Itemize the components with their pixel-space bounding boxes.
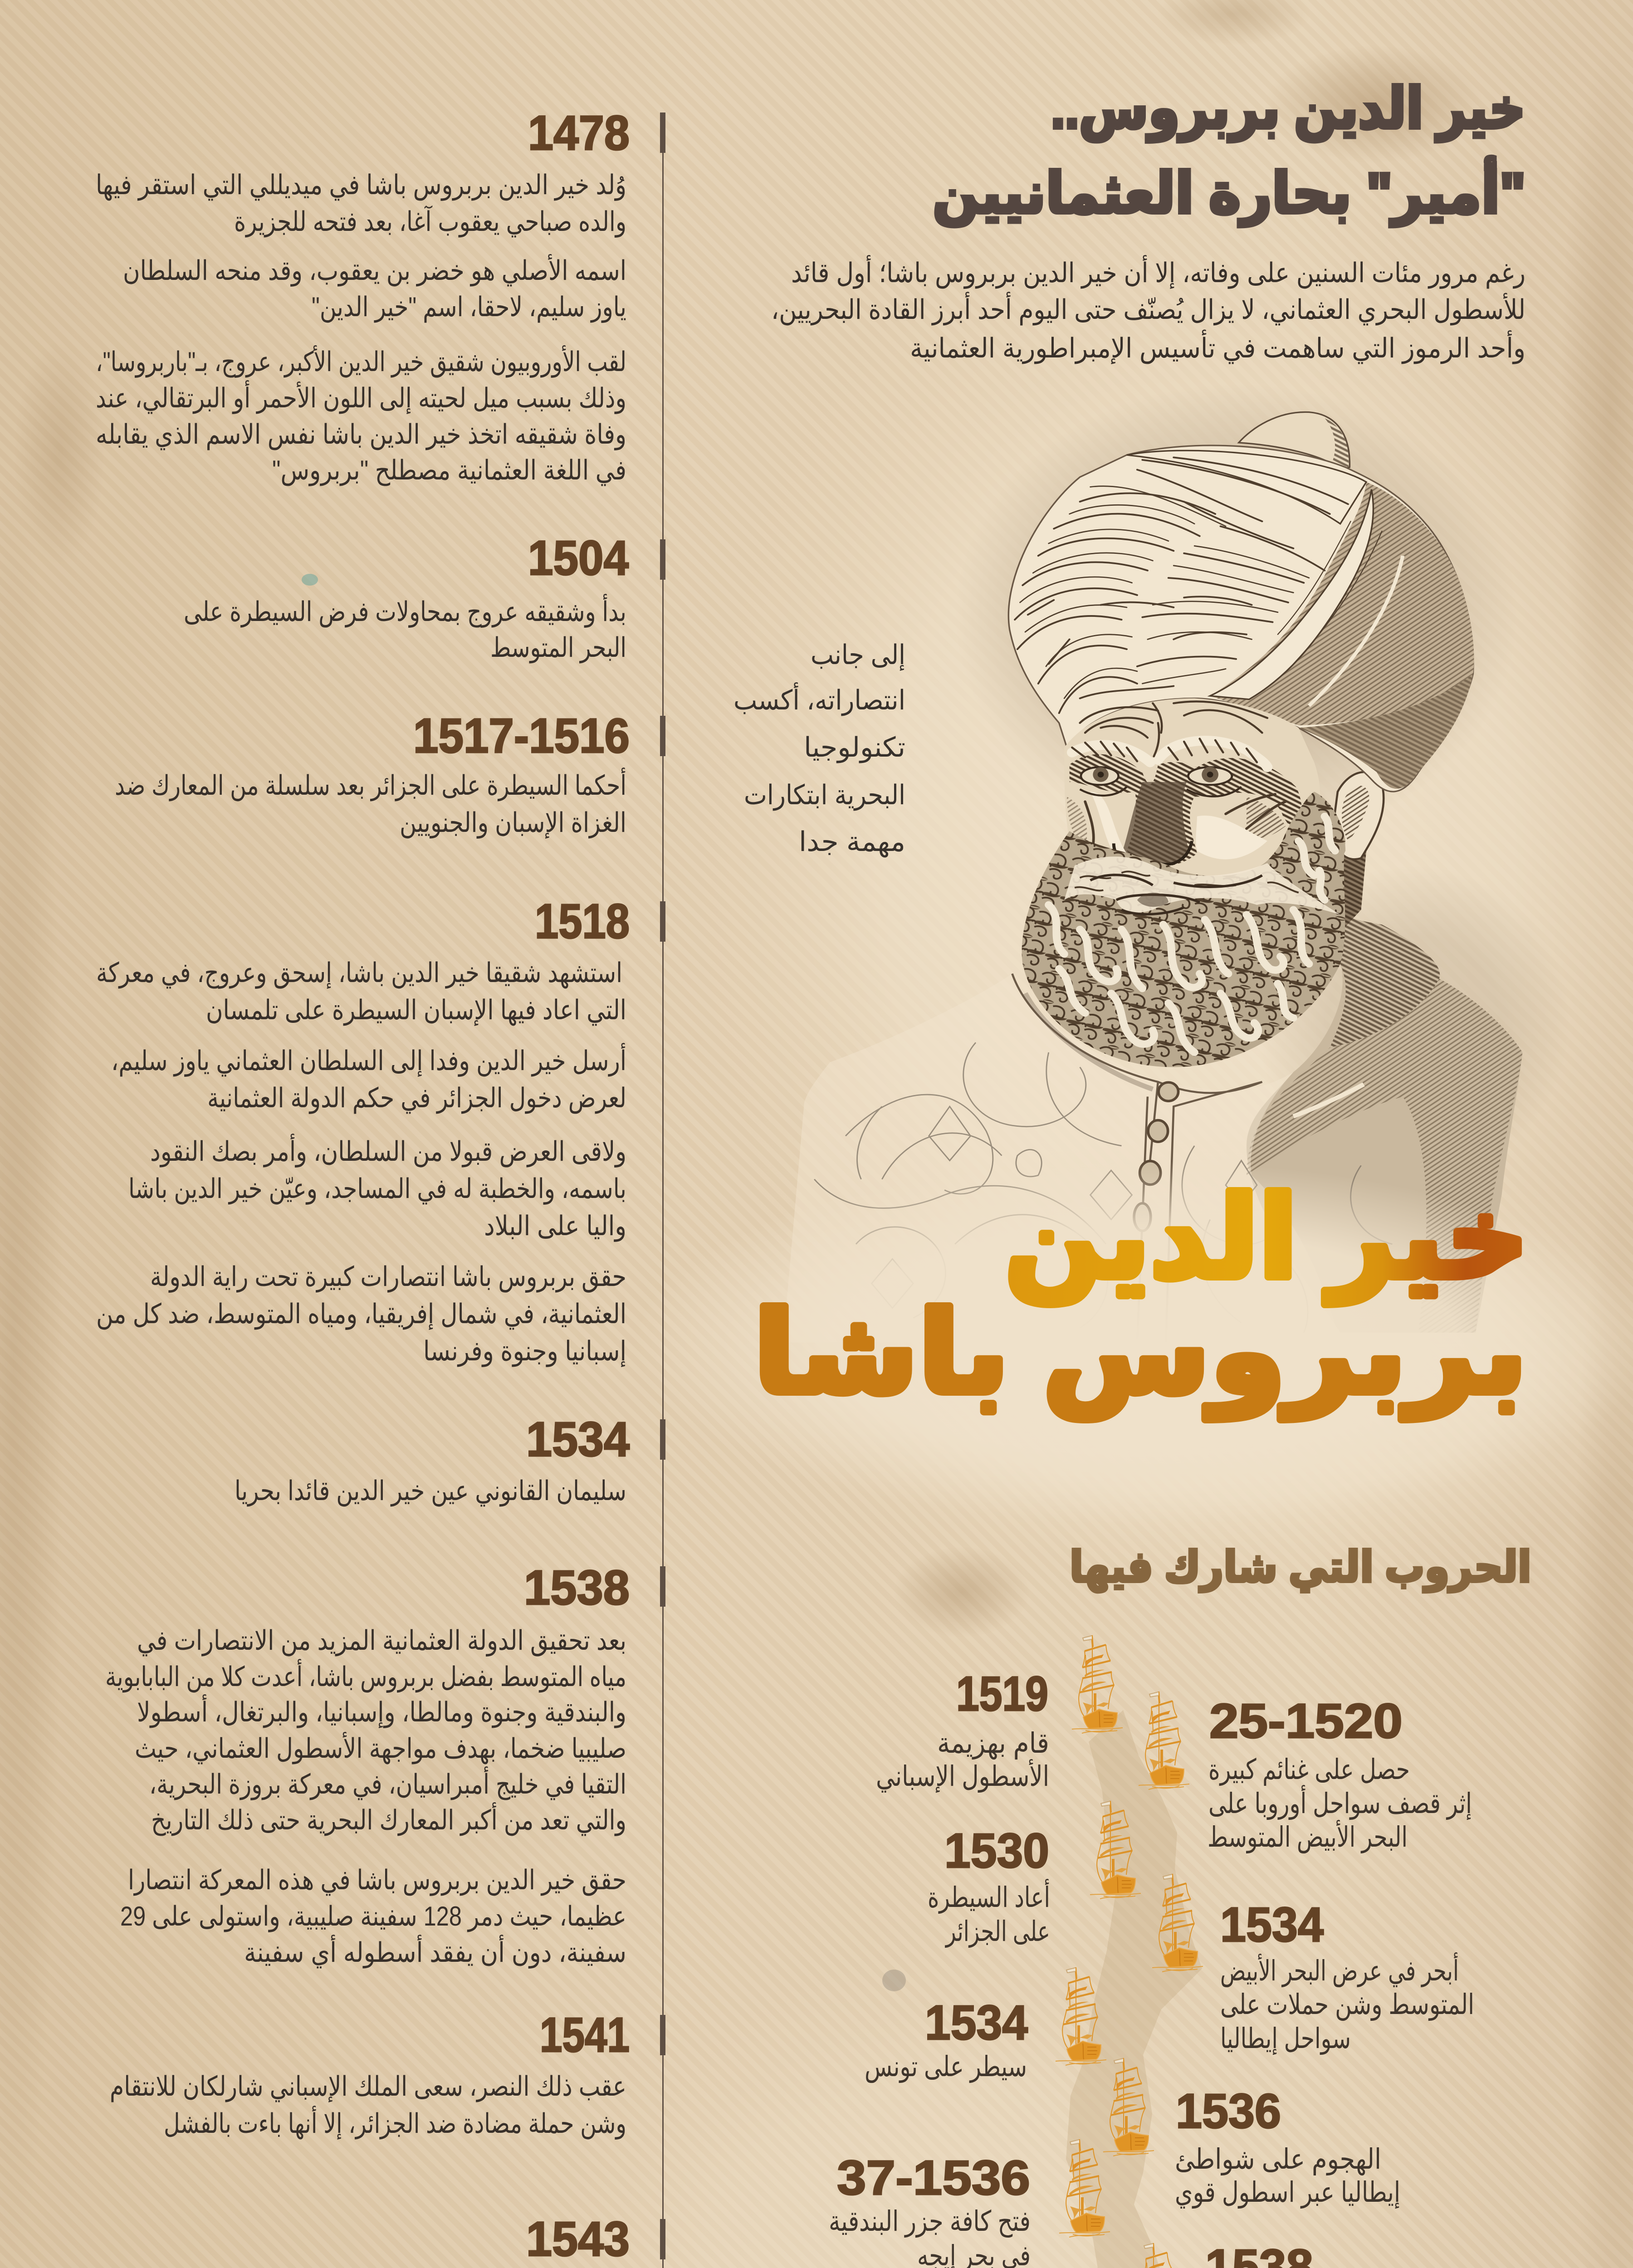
war: 1536-37: فتح كافة جزر البندقية [829,2206,1031,2238]
war: 1536: الهجوم على شواطئ [1175,2144,1381,2176]
side quote: انتصاراته، أكسب [733,682,905,716]
title: "أمير" بحارة العثمانيين [933,156,1525,227]
nose [1114,841,1192,867]
timeline axis [662,113,664,2268]
timeline: 1504: بدأ وشقيقه عروج بمحاولات فرض السيطرة على [184,594,626,628]
timeline: 1516-1517 [115,708,665,839]
war: 1536-37 [829,2150,1031,2268]
buttons [1134,1082,1178,1231]
timeline: 1478: لقب الأوروبيون شقيق خير الدين الأكبر، عروج، بـ"باربروسا"، [96,345,626,378]
war: 1520-25: حصل على غنائم كبيرة [1208,1754,1410,1786]
timeline: 1538 [105,1560,665,1969]
icon: ship 1 [1072,1635,1123,1733]
timeline: 1538: مياه المتوسط بفضل بربروس باشا، أعدت كلا من البابابوية [105,1659,626,1693]
ear [1332,772,1384,859]
timeline: 1518: استشهد شقيقا خير الدين باشا، إسحق وعروج، في معركة [96,958,622,989]
eyes [1080,767,1242,797]
war: 1519: قام بهزيمة [937,1728,1049,1760]
war: 1519: الأسطول الإسباني [876,1759,1049,1793]
portrait of Barbarossa [783,384,1569,1343]
shirt arabesque [814,1042,1392,1333]
war: 1536: إيطاليا عبر اسطول قوي [1175,2177,1400,2209]
timeline: 1538: عظيما، حيث دمر 128 سفينة صليبية، واستولى على 29 [120,1901,626,1932]
war: 1519: 1519 [956,1666,1048,1721]
war: 1534 right: أبحر في عرض البحر الأبيض [1220,1952,1459,1987]
timeline: 1504: 1504 [528,530,629,585]
timeline: 1518: ولاقى العرض قبولا من السلطان، وأمر بصك النقود [150,1134,626,1168]
side quote: إلى جانب [811,640,905,671]
timeline: 1518 [96,894,665,1367]
timeline: 1518: التي اعاد فيها الإسبان السيطرة على تلمسان [206,995,626,1026]
big name title: بربروس باشا [753,1290,1527,1420]
brows and forehead [1072,701,1286,846]
timeline: 1516-1517: الغزاة الإسبان والجنويين [400,807,626,839]
war: 1534 right: 1534 [1220,1897,1324,1952]
timeline: 1478: في اللغة العثمانية مصطلح "بربروس" [272,455,626,486]
war: 1530 [928,1823,1050,1948]
war: 1536: 1536 [1176,2083,1281,2138]
timeline: 1538: حقق خير الدين بربروس باشا في هذه المعركة انتصارا [128,1865,626,1896]
timeline: 1478: وذلك بسبب ميل لحيته إلى اللون الأحمر أو البرتقالي، عند [96,380,626,414]
intro paragraph [771,255,1525,364]
intro paragraph: وأحد الرموز التي ساهمت في تأسيس الإمبراطورية العثمانية [910,329,1525,364]
timeline: 1518: إسبانيا وجنوة وفرنسا [423,1336,626,1367]
timeline: 1538: 1538 [524,1560,630,1615]
timeline: 1478 [96,105,665,486]
war: 1530: 1530 [944,1823,1049,1878]
timeline: 1534 [235,1412,665,1507]
timeline: 1504 [184,530,665,664]
war: 1530: على الجزائر [945,1916,1050,1948]
timeline: 1543 [96,2211,665,2268]
icon: ship 3 [1090,1801,1141,1899]
big name title [753,1174,1529,1420]
timeline: 1538: بعد تحقيق الدولة العثمانية المزيد من الانتصارات في [137,1625,626,1657]
war: 1520-25 [1208,1693,1472,1853]
neck [1309,841,1366,949]
war: 1520-25: إثر قصف سواحل أوروبا على [1208,1785,1472,1820]
icon: ship 5 [1056,1967,1106,2065]
timeline: 1541: وشن حملة مضادة ضد الجزائر، إلا أنها باءت بالفشل [164,2106,626,2140]
timeline: 1518: 1518 [535,894,630,948]
face shadows [1067,754,1302,867]
beard [1022,792,1345,1067]
turban knob [1239,412,1349,470]
war: 1534 left [865,1995,1028,2083]
timeline: 1541: عقب ذلك النصر، سعى الملك الإسباني شارلكان للانتقام [110,2071,626,2102]
war: 1534 right: المتوسط وشن حملات على [1220,1989,1474,2021]
timeline: 1534: سليمان القانوني عين خير الدين قائدا بحريا [235,1476,626,1507]
timeline: 1538: صليبيا ضخما، بهدف مواجهة الأسطول العثماني، حيث [135,1732,626,1765]
timeline: 1541 [110,2007,665,2140]
timeline: 1504: البحر المتوسط [490,632,626,664]
timeline: 1478: اسمه الأصلي هو خضر بن يعقوب، وقد منحه السلطان [123,254,626,287]
title: خير الدين بربروس.. [1051,77,1525,142]
timeline: 1518: باسمه، والخطبة له في المساجد، وعيّن خير الدين باشا [128,1173,626,1205]
timeline: 1518: حقق بربروس باشا انتصارات كبيرة تحت راية الدولة [150,1261,626,1293]
face [1064,699,1320,912]
icon: ship 2 [1139,1691,1189,1789]
portrait fade at bottom [635,1161,1633,1524]
war: 1536-37: 37-1536 [837,2150,1030,2205]
title [933,77,1525,227]
timeline: 1478: 1478 [528,105,630,160]
side quote [733,640,905,858]
timeline: 1478: وفاة شقيقه اتخذ خير الدين باشا نفس الاسم الذي يقابله [96,419,626,450]
timeline: 1518: أرسل خير الدين وفدا إلى السلطان العثماني ياوز سليم، [111,1043,626,1077]
icon: ship 8 [1133,2243,1184,2268]
timeline: 1518: العثمانية، في شمال إفريقيا، ومياه المتوسط، ضد كل من [96,1299,626,1330]
stain behind the ships [1066,1710,1202,2268]
timeline: 1478: والده صباحي يعقوب آغا، بعد فتحه للجزيرة [234,205,626,238]
timeline: 1538: التقيا في خليج أمبراسيان، في معركة بروزة البحرية، [149,1766,626,1800]
turban lines [1015,457,1382,713]
wars section heading: الحروب التي شارك فيها [1070,1543,1531,1592]
side quote: مهمة جدا [799,826,905,858]
war: 1534 left: سيطر على تونس [865,2051,1027,2083]
timeline: 1534: 1534 [526,1412,630,1466]
war: 1534 right: سواحل إيطاليا [1220,2023,1351,2055]
timeline: 1478: وُلد خير الدين بربروس باشا في ميديللي التي استقر فيها [96,170,626,201]
timeline: 1538: سفينة، دون أن يفقد أسطوله أي سفينة [244,1935,626,1969]
side quote: تكنولوجيا [804,732,905,763]
timeline: 1543: 1543 [526,2211,630,2266]
icon: ship 4 [1152,1874,1203,1972]
turban [1008,445,1473,792]
intro paragraph: للأسطول البحري العثماني، لا يزال يُصنّف حتى اليوم أحد أبرز القادة البحريين، [771,292,1525,326]
war: 1534 left: 1534 [925,1995,1028,2050]
timeline: 1518: لعرض دخول الجزائر في حكم الدولة العثمانية [207,1083,626,1114]
war: 1519 [876,1666,1049,1793]
timeline: 1478: ياوز سليم، لاحقا، اسم "خير الدين" [312,292,626,323]
timeline: 1516-1517: أحكما السيطرة على الجزائر بعد سلسلة من المعارك ضد [115,767,626,802]
icon: ship 6 [1103,2058,1154,2156]
timeline: 1541: 1541 [540,2007,630,2062]
side quote: البحرية ابتكارات [744,780,905,811]
timeline: 1538: والبندقية وجنوة ومالطا، وإسبانيا، والبرتغال، أسطولا [137,1694,626,1728]
intro paragraph: رغم مرور مئات السنين على وفاته، إلا أن خير الدين بربروس باشا؛ أول قائد [791,255,1525,289]
war: 1520-25: البحر الأبيض المتوسط [1208,1819,1408,1853]
war: 1534 right [1220,1897,1474,2055]
timeline: 1538: والتي تعد من أكبر المعارك البحرية حتى ذلك التاريخ [151,1802,626,1836]
coat [1247,895,1522,1333]
war: 1530: أعاد السيطرة [928,1879,1050,1914]
icon: ship 7 [1059,2139,1110,2237]
timeline: 1516-1517: 1517-1516 [413,708,630,763]
timeline: 1518: واليا على البلاد [484,1211,626,1242]
war: 1536 [1175,2083,1400,2209]
war: 1520-25: 25-1520 [1209,1693,1403,1748]
big name title: خير الدين [1005,1174,1529,1305]
turban right band [1210,482,1474,725]
shirt [783,974,1340,1343]
